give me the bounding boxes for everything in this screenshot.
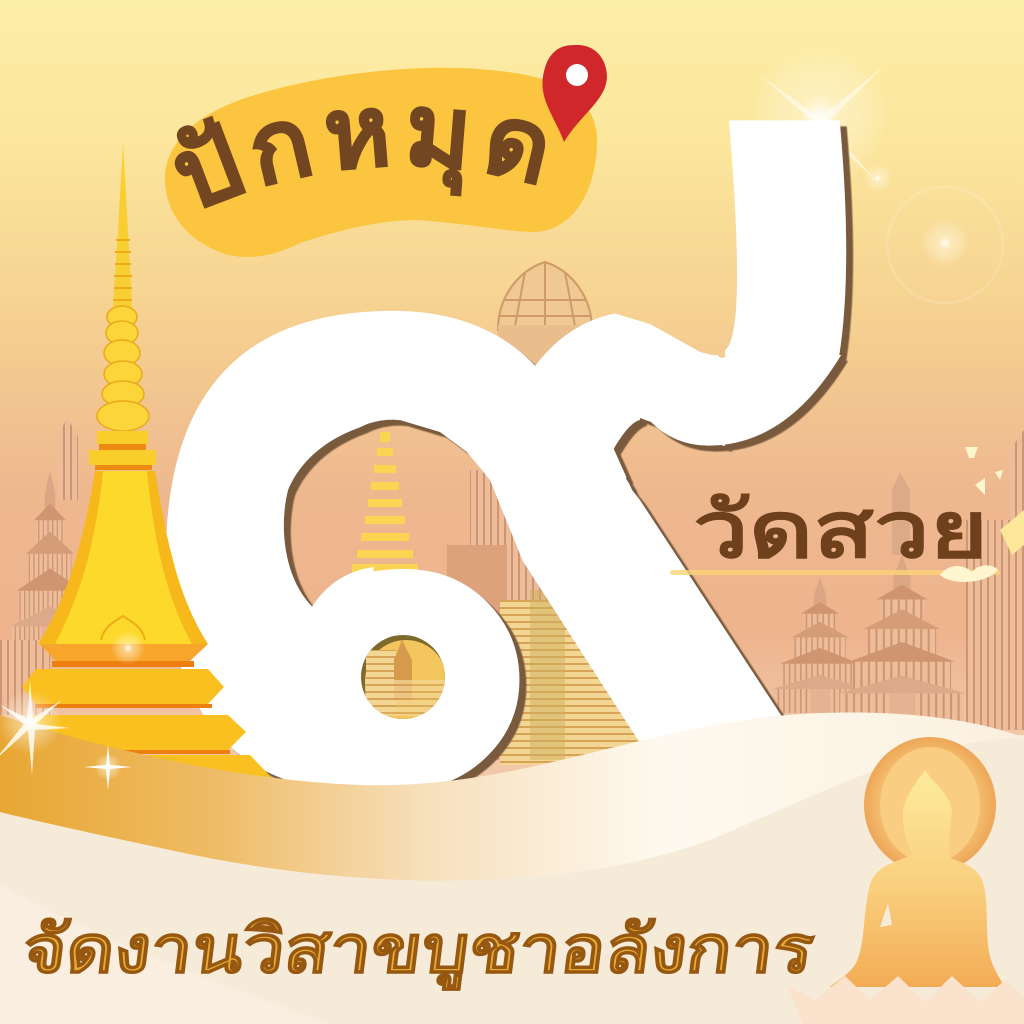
wave base (0, 735, 1024, 1024)
butterflies (940, 447, 1024, 582)
lotus base (787, 976, 1024, 1024)
stupa bands (40, 644, 208, 661)
heading: ปักหมุด (174, 106, 546, 209)
background temples left (0, 418, 90, 715)
lens flare lights (750, 45, 1003, 303)
yellow label blob (165, 68, 597, 257)
stupa bell (38, 471, 208, 644)
stupa collar (89, 431, 156, 465)
lower wave highlight (0, 885, 330, 1024)
stupa (20, 143, 272, 778)
background temples right (708, 430, 1024, 730)
stupa spire (113, 143, 132, 307)
silhouette (830, 770, 1005, 987)
wave ribbon (0, 712, 1024, 881)
sparkles (0, 631, 145, 790)
heading: วัดสวย: วัดสวย (693, 487, 988, 574)
numeral nine (166, 120, 854, 786)
stupa lotus tiers (97, 306, 149, 431)
footer title: จัดงานวิสาขบูชาอลังการ (18, 914, 818, 991)
background temple center (447, 470, 650, 765)
heading: ปักหมุด: ปักหมุด (174, 106, 546, 209)
golden stupa behind numeral (352, 432, 418, 574)
buddha (787, 737, 1024, 1024)
halo (864, 737, 996, 873)
numeral eye window (360, 634, 447, 722)
background temple dome (498, 262, 598, 365)
glow line (670, 570, 1000, 575)
map pin (542, 45, 607, 142)
